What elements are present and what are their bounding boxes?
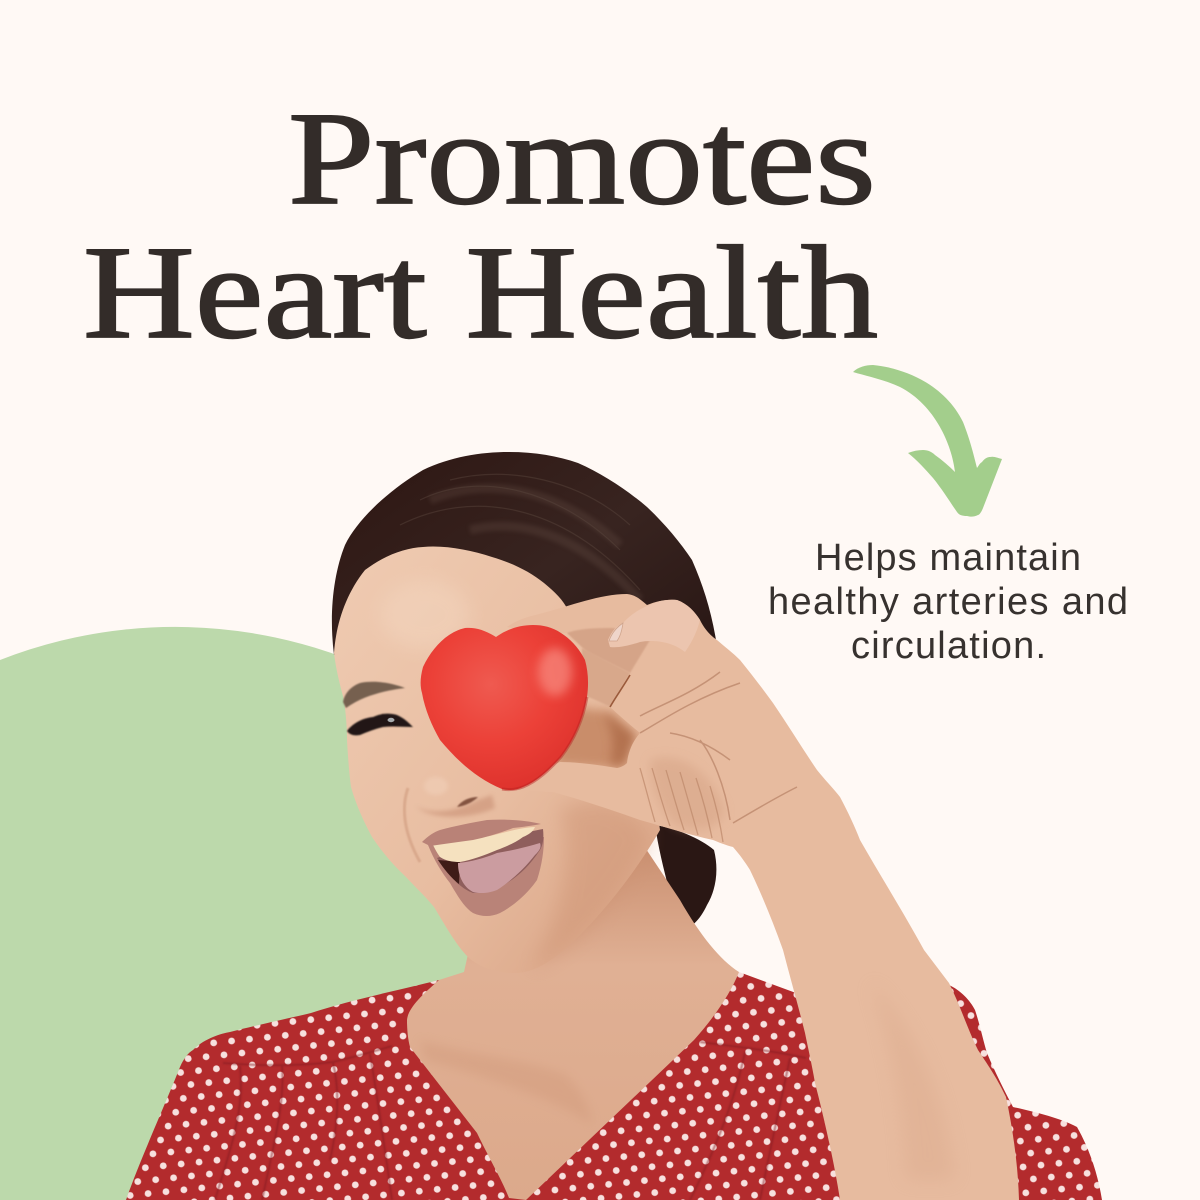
hair sheen — [430, 488, 640, 600]
nostril — [457, 797, 478, 807]
teeth — [433, 827, 535, 862]
cheek shadow behind hand — [555, 705, 635, 768]
title line: Heart Health: Heart Health — [83, 219, 878, 366]
blouse — [126, 972, 1102, 1200]
arrow — [853, 365, 1002, 517]
jaw shading — [530, 802, 650, 970]
mouth shadow — [438, 860, 460, 884]
thumb pad shade — [650, 757, 725, 830]
blouse seams and gathers — [215, 1042, 806, 1200]
heart — [421, 625, 588, 790]
upper lip — [422, 820, 541, 846]
curled finger — [608, 600, 700, 652]
supporting text: healthy arteries and — [768, 581, 1128, 623]
arm and hand — [507, 594, 1019, 1200]
back of hair — [332, 452, 716, 720]
neck and chest — [407, 840, 739, 1200]
finger crease — [610, 675, 630, 707]
supporting text: Helps maintain — [815, 537, 1081, 579]
finger behind heart — [582, 648, 630, 707]
hair bun — [655, 825, 716, 930]
palm lines — [640, 672, 797, 823]
mouth interior — [437, 829, 543, 893]
thumb wrinkles — [640, 768, 723, 842]
heart right highlight — [538, 648, 572, 696]
deep shadow near palm — [603, 712, 636, 766]
smile line — [404, 788, 420, 862]
nose highlight — [424, 777, 448, 795]
title — [83, 85, 878, 366]
green circle — [0, 627, 655, 1200]
eyebrow — [343, 682, 405, 708]
hair strands — [400, 474, 640, 590]
face — [334, 547, 660, 973]
space under index finger — [567, 628, 650, 673]
title line: Promotes: Promotes — [288, 85, 876, 232]
forehead highlight — [380, 580, 470, 650]
winking eye — [347, 714, 413, 735]
mouth — [422, 820, 544, 916]
fingernail — [609, 623, 623, 641]
lower lip — [428, 837, 544, 916]
supporting text — [768, 537, 1128, 667]
nose shadow — [416, 795, 495, 817]
heart lower edge shading — [502, 697, 587, 790]
woman holding heart — [126, 452, 1102, 1200]
tongue — [458, 843, 541, 893]
forearm shading — [870, 980, 955, 1180]
supporting text: circulation. — [851, 625, 1046, 667]
collarbone shadow — [420, 1040, 592, 1125]
